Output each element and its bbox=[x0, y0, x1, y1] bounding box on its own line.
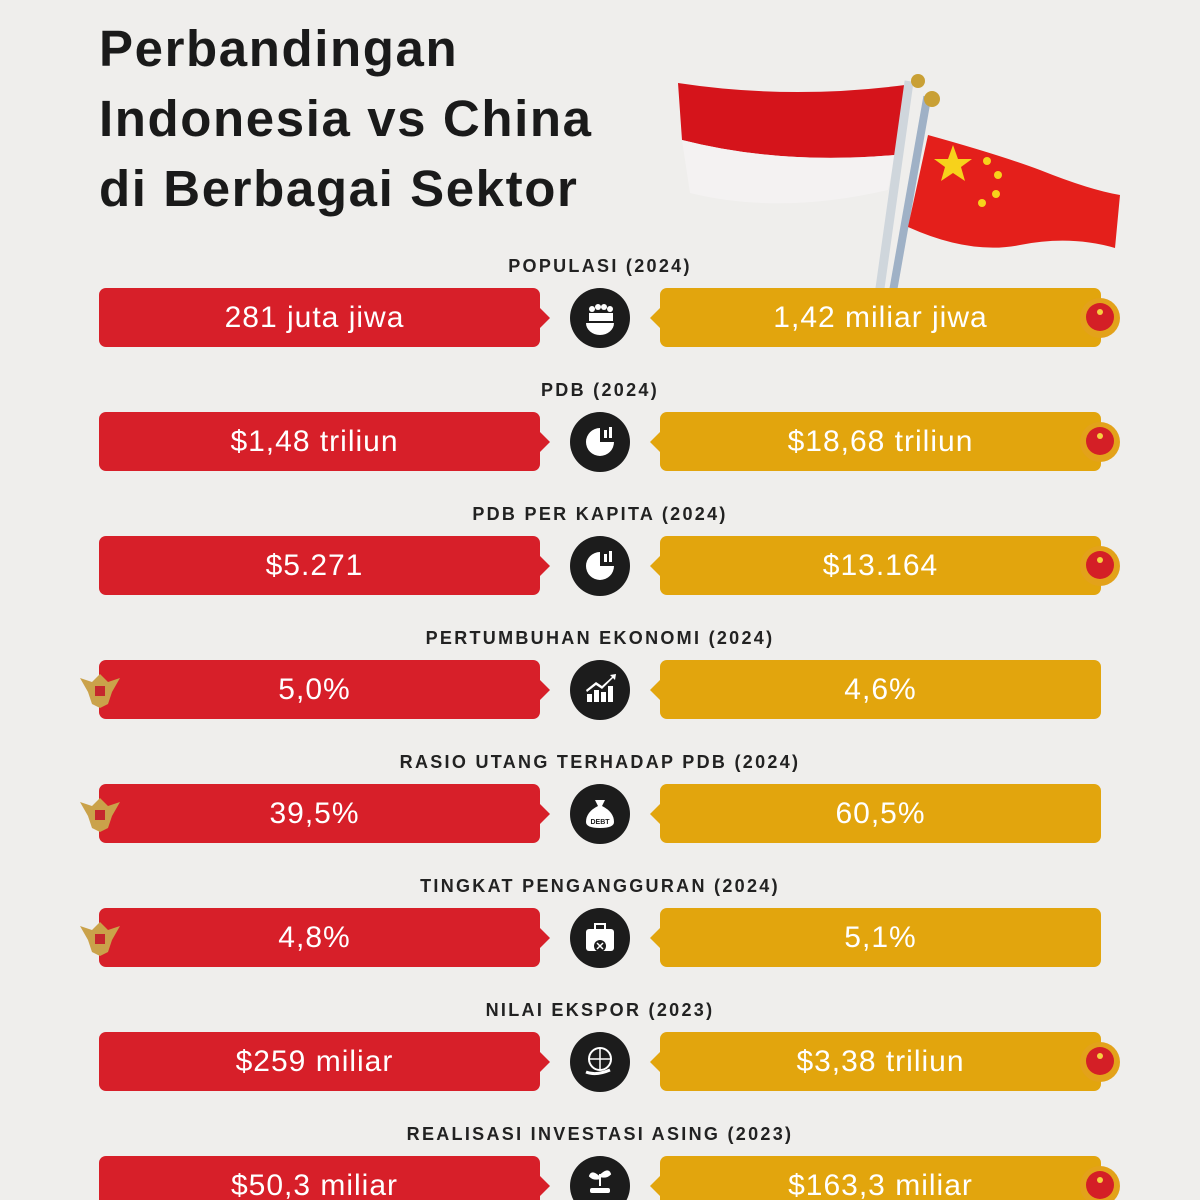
text: POPULASI (2024) bbox=[508, 256, 692, 276]
text: NILAI EKSPOR (2023) bbox=[486, 1000, 714, 1020]
row: populasi: 1,42 miliar jiwa bbox=[773, 301, 988, 334]
icon: garuda bbox=[80, 674, 120, 708]
row: pengangguran: 5,1% bbox=[844, 921, 917, 954]
icon: briefcase bbox=[570, 908, 630, 968]
row: pdb: $1,48 triliun bbox=[230, 425, 399, 458]
flags illustration bbox=[678, 74, 1120, 288]
row: investasi asing bbox=[99, 1124, 1120, 1200]
icon: plant money bbox=[570, 1156, 630, 1200]
text: REALISASI INVESTASI ASING (2023) bbox=[407, 1124, 793, 1144]
row: pertumbuhan ekonomi: 4,6% bbox=[844, 673, 917, 706]
icon: china emblem bbox=[1080, 298, 1120, 338]
title bbox=[99, 20, 593, 217]
icon: pie chart bbox=[570, 412, 630, 472]
text: PERTUMBUHAN EKONOMI (2024) bbox=[426, 628, 774, 648]
row: ekspor bbox=[99, 1000, 1120, 1092]
row: rasio utang bbox=[80, 752, 1101, 844]
icon: globe bbox=[570, 1032, 630, 1092]
row: pengangguran bbox=[80, 876, 1101, 968]
row: ekspor: $3,38 triliun bbox=[796, 1045, 965, 1078]
row: pengangguran: 4,8% bbox=[278, 921, 351, 954]
title: Indonesia vs China bbox=[99, 90, 593, 147]
row: pertumbuhan ekonomi bbox=[80, 628, 1101, 720]
icon: garuda bbox=[80, 798, 120, 832]
title: Perbandingan bbox=[99, 20, 458, 77]
icon: growth chart bbox=[570, 660, 630, 720]
text: PDB (2024) bbox=[541, 380, 659, 400]
icon: garuda bbox=[80, 922, 120, 956]
row: pertumbuhan ekonomi: 5,0% bbox=[278, 673, 351, 706]
row: pdb bbox=[99, 380, 1120, 472]
row: pdb per kapita: $13.164 bbox=[823, 549, 938, 582]
row: rasio utang: 60,5% bbox=[835, 797, 926, 830]
icon: china emblem bbox=[1080, 1166, 1120, 1200]
icon: pie chart bbox=[570, 536, 630, 596]
icon: debt bag bbox=[570, 784, 630, 844]
row: populasi: 281 juta jiwa bbox=[225, 301, 404, 334]
title: di Berbagai Sektor bbox=[99, 160, 578, 217]
row: pdb per kapita bbox=[99, 504, 1120, 596]
row: populasi bbox=[99, 256, 1120, 348]
icon: china emblem bbox=[1080, 422, 1120, 462]
icon: china emblem bbox=[1080, 1042, 1120, 1082]
text: TINGKAT PENGANGGURAN (2024) bbox=[420, 876, 780, 896]
text: RASIO UTANG TERHADAP PDB (2024) bbox=[400, 752, 800, 772]
icon: debt bag: DEBT bbox=[590, 819, 610, 826]
row: pdb per kapita: $5.271 bbox=[266, 549, 363, 582]
icon: people bbox=[570, 288, 630, 348]
row: pdb: $18,68 triliun bbox=[788, 425, 973, 458]
row: ekspor: $259 miliar bbox=[236, 1045, 393, 1078]
icon: china emblem bbox=[1080, 546, 1120, 586]
row: rasio utang: 39,5% bbox=[269, 797, 360, 830]
text: PDB PER KAPITA (2024) bbox=[472, 504, 728, 524]
